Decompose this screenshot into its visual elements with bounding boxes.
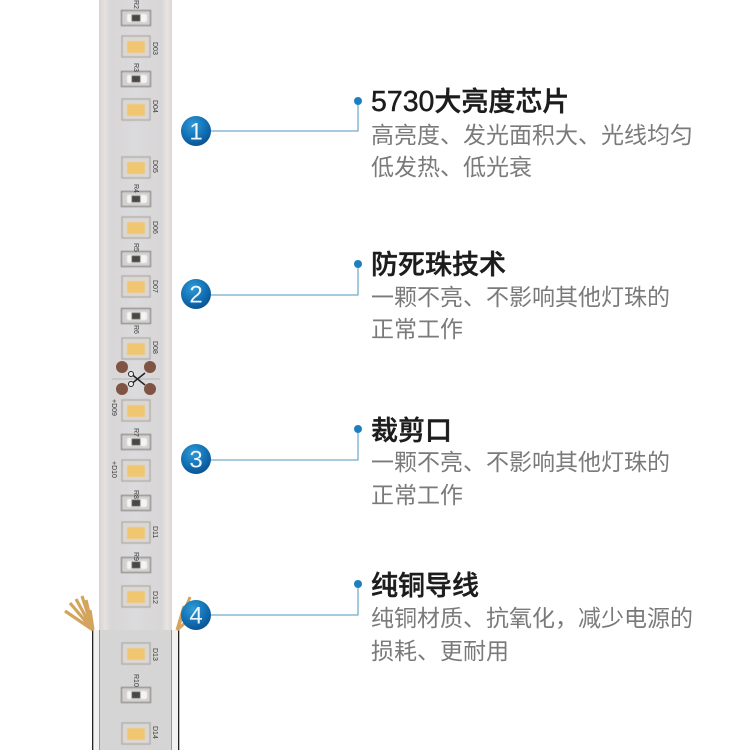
description 1: 高亮度、发光面积大、光线均匀	[371, 122, 693, 148]
component labels: D11	[151, 526, 158, 538]
component labels: R8	[132, 490, 139, 499]
component labels: R5	[132, 243, 139, 252]
description 1: 低发热、低光衰	[371, 154, 532, 180]
heading 4: 纯铜导线	[371, 571, 479, 601]
component labels: R4	[132, 184, 139, 193]
copper wire right	[177, 597, 194, 630]
resistors	[122, 10, 150, 702]
description 3	[371, 449, 670, 508]
description 2: 正常工作	[371, 316, 463, 342]
component labels: D14	[151, 726, 158, 739]
sleeve end section	[92, 630, 179, 750]
number badge 2: 2	[189, 282, 203, 308]
component labels: R6	[132, 325, 139, 334]
callout 4	[181, 571, 693, 664]
connector 3	[205, 430, 358, 460]
connector dot 4	[354, 580, 362, 588]
description 2: 一颗不亮、不影响其他灯珠的	[371, 284, 670, 310]
description 4: 损耗、更耐用	[371, 638, 509, 664]
component labels: R2	[132, 0, 139, 9]
component labels: D07	[151, 280, 158, 293]
callout 2	[181, 250, 670, 342]
component labels: R7	[132, 428, 139, 437]
component labels: R3	[132, 63, 139, 72]
connector dot 2	[354, 260, 362, 268]
component labels: D13	[151, 648, 158, 661]
cut mark with copper pads and scissors	[112, 361, 160, 395]
description 4: 纯铜材质、抗氧化，减少电源的	[371, 605, 693, 631]
component labels: D05	[151, 160, 158, 173]
number badge 3	[181, 444, 211, 474]
LED chips	[122, 36, 150, 744]
component labels	[110, 0, 158, 739]
component labels: +D09	[110, 399, 117, 416]
component labels: D03	[151, 42, 158, 55]
number badge 4	[181, 600, 211, 630]
description 2	[371, 284, 670, 342]
description 1	[371, 122, 693, 180]
callout 3	[181, 416, 670, 508]
component labels: D06	[151, 221, 158, 234]
connector 2	[205, 265, 358, 295]
description 3: 一颗不亮、不影响其他灯珠的	[371, 449, 670, 475]
heading 3: 裁剪口	[371, 416, 452, 446]
copper wire left	[65, 596, 93, 630]
component labels: D04	[151, 100, 158, 113]
number badge 4: 4	[189, 602, 203, 630]
number badge 1	[181, 116, 211, 146]
component labels: +D10	[110, 461, 117, 478]
component labels: D08	[151, 341, 158, 354]
connector dot 3	[354, 425, 362, 433]
number badge 3: 3	[189, 446, 203, 474]
connector 4	[205, 585, 358, 615]
heading 2: 防死珠技术	[371, 250, 506, 280]
component labels: D12	[151, 591, 158, 604]
description 3: 正常工作	[371, 482, 463, 508]
number badge 2	[181, 279, 211, 309]
component labels: R10	[132, 674, 139, 687]
number badge 1: 1	[189, 118, 203, 146]
callout 1	[181, 86, 693, 180]
connector dot 1	[354, 97, 362, 105]
component labels: R9	[132, 552, 139, 561]
heading 1: 5730大亮度芯片	[371, 86, 569, 118]
connector 1	[205, 102, 358, 131]
LED strip	[92, 0, 179, 750]
description 4	[371, 605, 693, 664]
